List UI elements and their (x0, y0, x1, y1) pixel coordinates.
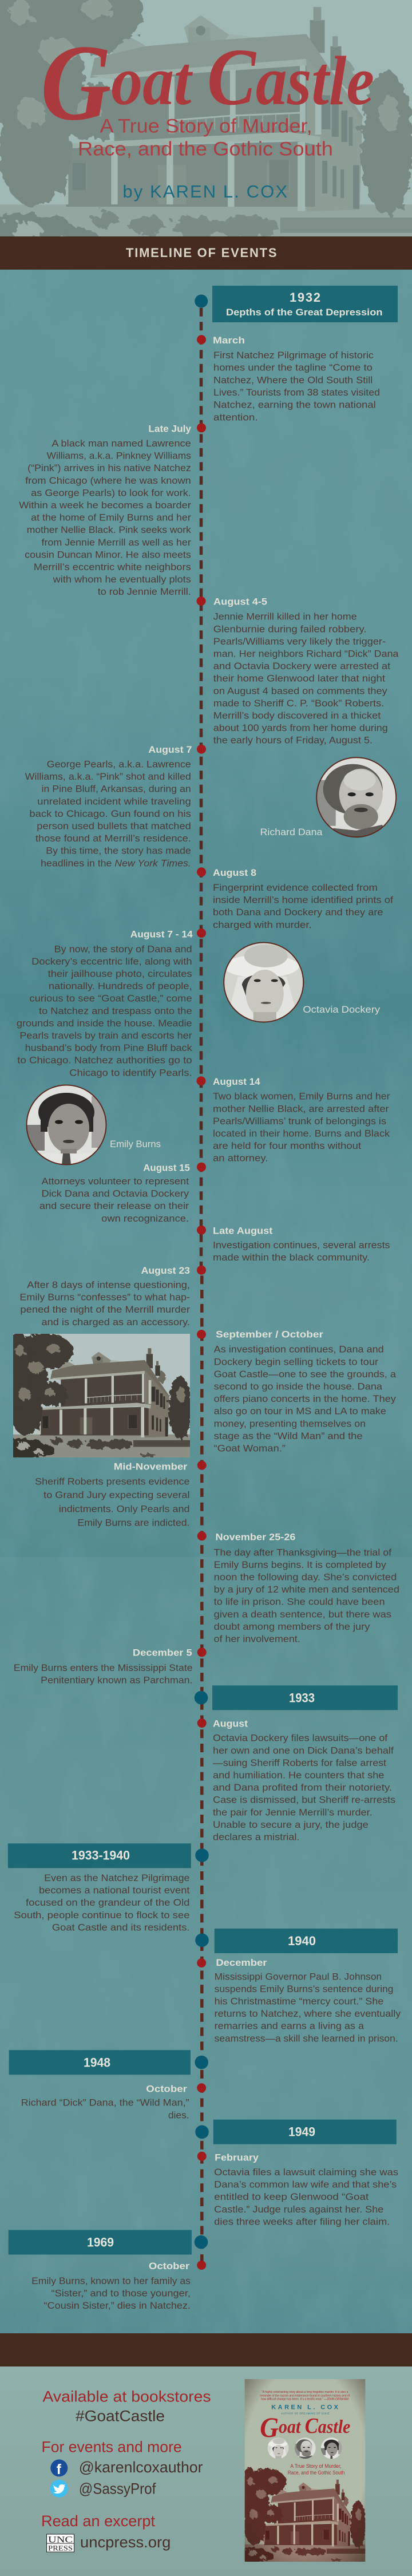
event: August 7: Williams, a.k.a. “Pink” shot and killed (25, 772, 191, 782)
event: August 8: charged with murder. (213, 920, 312, 930)
year block: 1932 (195, 286, 398, 322)
event: Mid-November: Mid-November (114, 1461, 188, 1472)
year block: 1948 (9, 2050, 208, 2075)
year block: 1969 (9, 2230, 208, 2254)
event: August 14 (197, 1076, 390, 1164)
event: Late August (197, 1226, 390, 1263)
year block: 1933-1940: 1933-1940 (72, 1848, 130, 1863)
event: August 7: unrelated incident while traveling (37, 796, 191, 807)
event: August 1933: and Dana profited from their notoriety. (213, 1783, 392, 1793)
event: August 7: headlines in the New York Times. (41, 858, 191, 868)
event: August 7: those found at Merrill’s residence. (35, 833, 191, 844)
event: December 1940: remarries and earns a living as a (215, 2021, 365, 2032)
logo: UNC Press and url: uncpress.org (80, 2534, 171, 2551)
event: Mid-November: to Grand Jury expecting several (43, 1490, 190, 1500)
event: November 25-26 (197, 1531, 399, 1644)
year block: 1933: 1933 (289, 1690, 315, 1705)
event: October 1948: Richard “Dick” Dana, the “Wild Man,” (21, 2098, 189, 2108)
event: August 4-5: man. Her neighbors Richard “Dick” Dana (213, 649, 399, 659)
event: March: attention. (213, 412, 258, 422)
event: February 1949: February (215, 2152, 259, 2163)
event: August 7: in Pine Bluff, Arkansas, during an (41, 784, 191, 795)
event: August 4-5: about 100 yards from her home during (213, 723, 388, 733)
event: August 15: own recognizance. (101, 1214, 189, 1224)
event: August 7: August 7 (148, 744, 192, 755)
event: August 7: George Pearls, a.k.a. Lawrence (47, 759, 191, 769)
event: August 7 - 14: curious to see “Goat Castle,” come (29, 994, 192, 1004)
year block: 1933-1940: focused on the grandeur of the Old (26, 1898, 190, 1908)
portrait: Richard Dana: Richard Dana (260, 827, 323, 837)
event: August 1933: and humiliation. He counters that she (213, 1770, 384, 1780)
event: February 1949: Dana’s common law wife and that she’s (214, 2180, 397, 2190)
event: August 4-5: Merrill’s body discovered in a thicket (213, 711, 381, 721)
event: August 23: After 8 days of intense questioning, (27, 1280, 190, 1290)
event: March: homes under the tagline “Come to (213, 363, 373, 373)
event: August 4-5: made to Sheriff C. P. “Book” Roberts. (213, 698, 384, 709)
heading band: timeline of events: TIMELINE OF EVENTS (126, 246, 277, 260)
event: February 1949: entitled to keep Glenwood “Goat (214, 2192, 369, 2202)
event: August 15: Attorneys volunteer to represent (41, 1176, 189, 1187)
social: twitter (50, 2480, 156, 2498)
event: August 1933: Case is dismissed, but Sheriff re-arrests (213, 1795, 395, 1805)
logo: UNC Press and url: PRESS (48, 2544, 73, 2552)
event: Late July: from Chicago (where he was known (25, 476, 191, 486)
event: Late August: Investigation continues, several arrests (213, 1240, 390, 1250)
event: November 25-26: Emily Burns begins. It is completed by (214, 1560, 387, 1570)
event: March: First Natchez Pilgrimage of historic (213, 350, 374, 361)
subtitle: Race, and the Gothic South (78, 139, 333, 160)
year block: 1932: Depths of the Great Depression (226, 307, 382, 318)
event: March (197, 335, 380, 422)
book cover: KAREN L. COX (271, 2404, 339, 2411)
event: August 23: Emily Burns “confesses” to what hap- (19, 1293, 190, 1303)
social: twitter: @SassyProf (79, 2480, 156, 2497)
event: August 4-5: their home Glenwood later that night (213, 674, 386, 684)
event: August 1933: declares a mistrial. (213, 1832, 300, 1842)
event: August 7 - 14: their jailhouse photo, circulates (48, 969, 192, 979)
event: August 7 - 14: to Natchez and trespass onto the (39, 1006, 192, 1016)
event: August 7: person used bullets that matched (37, 821, 191, 831)
event: November 25-26: to life in prison. She could have been (214, 1597, 385, 1607)
event: August 7 - 14: nationally. Hundreds of people, (49, 981, 192, 991)
book cover: AUTHOR OF DREAMING OF DIXIE (281, 2412, 330, 2415)
year block: 1948: 1948 (84, 2056, 110, 2070)
event: Late July: cousin Duncan Minor. He also meets (25, 550, 191, 560)
year block: 1933-1940: Goat Castle and its residents. (52, 1922, 190, 1933)
event: September / October: stage as the “Wild Man” and the (214, 1431, 363, 1441)
event: August 4-5 (197, 596, 399, 746)
event: March: Lives.” Tourists from 38 states visited (213, 388, 380, 398)
event: August 8: inside Merrill’s home identified prints of (213, 895, 393, 906)
event: Mid-November: Sheriff Roberts presents evidence (35, 1476, 189, 1487)
portrait: Emily Burns: Emily Burns (110, 1139, 161, 1149)
event: December 1940: seamstress—a skill she learned in prison. (215, 2033, 398, 2044)
event: August 7 - 14: husband’s body from Pine Bluff back (25, 1043, 192, 1053)
text: availability (42, 2388, 211, 2424)
event: November 25-26: noon the following day. She’s convicted (214, 1572, 397, 1582)
event: August 7 - 14: Chicago to identify Pearls. (69, 1068, 192, 1078)
event: October 1948: dies. (168, 2111, 189, 2121)
event: August 4-5: the early hours of Friday, August 5. (213, 736, 373, 746)
event: September / October: second to go inside the house. Dana (214, 1382, 383, 1392)
event: Late July: Within a week he becomes a boarder (19, 500, 191, 511)
text: availability: #GoatCastle (76, 2407, 165, 2424)
event: December 1940: December (216, 1957, 267, 1968)
year block: 1969: 1969 (87, 2235, 114, 2250)
event: December 1940: his Christmastime “mercy court.” She (215, 1997, 383, 2007)
event: September / October: As investigation continues, Dana and (214, 1345, 384, 1355)
event: August 7: back to Chicago. Gun found on his (29, 809, 191, 819)
year block: 1933-1940: becomes a national tourist event (39, 1886, 190, 1896)
event: Late July: Late July (148, 423, 192, 434)
event: August 14: Two black women, Emily Burns and her (213, 1092, 390, 1102)
event: Late July: at the home of Emily Burns and her (31, 513, 191, 523)
event: September / October: also go on tour in MS and LA to make (214, 1406, 386, 1417)
event: September / October: September / October (216, 1329, 323, 1340)
event: Late July: Merrill’s eccentric white neighbors (34, 562, 191, 572)
event: November 25-26: given a death sentence, but there was (214, 1609, 391, 1619)
text: availability: Available at bookstores (42, 2388, 211, 2405)
event: November 25-26: of her involvement. (214, 1634, 300, 1644)
event: August 8 (197, 867, 393, 930)
event: August 14: mother Nellie Black, are arrested after (213, 1104, 389, 1114)
event: August 8: both Dana and Dockery and they are (213, 907, 383, 918)
event: December 5: Penitentiary known as Parchman. (41, 1676, 192, 1686)
event: August 14: Pearls/Williams’ trunk of belongings is (213, 1116, 386, 1127)
event: September / October: “Goat Woman.” (214, 1444, 286, 1454)
event: August 15: and secure their release on their (39, 1201, 189, 1211)
subtitle: A True Story of Murder, (100, 116, 312, 137)
event: August 4-5: on August 4 based on comments they (213, 686, 388, 696)
event: March: March (213, 335, 245, 346)
event: August 7 - 14: Dockery’s eccentric life, along with (31, 957, 192, 967)
event: August 23: pened the night of the Merrill murder (20, 1305, 191, 1315)
event: December 1940 (197, 1957, 401, 2044)
event: Late July: Williams, a.k.a. Pinkney Williams (47, 451, 191, 461)
event: August 1933 (197, 1718, 395, 1842)
text: events heading: For events and more (41, 2439, 182, 2456)
event: Late July: to rob Jennie Merrill. (98, 587, 191, 597)
event: August 1933: her own and one on Dick Dana’s behalf (213, 1745, 394, 1756)
event: October 1969: Emily Burns, known to her family as (31, 2276, 191, 2286)
event: September / October (197, 1329, 397, 1454)
year block: 1949: 1949 (288, 2125, 315, 2139)
author byline: by KAREN L. COX (122, 181, 287, 202)
event: August 7 - 14: to Chicago. Natchez authorities go to (17, 1056, 192, 1066)
timeline axis dashed line (201, 308, 202, 2261)
event: November 25-26: doubt among members of the jury (214, 1622, 370, 1632)
panel: footer background (0, 2366, 412, 2576)
year block: 1933-1940: South, people continue to flock to see (14, 1910, 190, 1921)
event: November 25-26: The day after Thanksgiving—the trial of (214, 1547, 392, 1558)
event: October 1969: “Sister,” and to those younger, (52, 2288, 191, 2298)
event: August 8: August 8 (213, 867, 256, 878)
event: March: Natchez, earning the town national (213, 400, 376, 410)
event: Late July: (“Pink”) arrives in his native Natchez (27, 463, 191, 473)
event: August 7 - 14: Pearls travels by train and escorts her (19, 1030, 192, 1041)
year block: 1933-1940 (8, 1843, 209, 1933)
event: August 23: and is charged as an accessory. (41, 1317, 190, 1327)
event: October 1948: October (146, 2083, 187, 2094)
event: August 1933: —suing Sheriff Roberts for false arrest (213, 1758, 386, 1768)
event: September / October: offers piano concerts in the home. They (214, 1394, 397, 1404)
year block: 1949 (195, 2120, 397, 2144)
event: February 1949: dies three weeks after filing her claim. (214, 2217, 390, 2227)
book cover: reminder of the racism and intolerance found in southern history and of (260, 2394, 350, 2397)
event: March: Natchez, Where the Old South Still (213, 375, 373, 385)
event: August 4-5: Pearls/Williams very likely the trigger- (213, 637, 386, 647)
book cover: G (260, 2411, 279, 2443)
event: September / October: money, presenting themselves on (214, 1419, 366, 1429)
portrait: Octavia Dockery (224, 942, 381, 1026)
event: August 7 - 14: grounds and inside the house. Meadie (17, 1018, 192, 1029)
event: Mid-November (35, 1461, 207, 1528)
event: September / October: Goat Castle—one to see the grounds, a (214, 1369, 397, 1380)
event: August 14: August 14 (213, 1076, 260, 1087)
portrait: Octavia Dockery: Octavia Dockery (303, 1004, 381, 1015)
event: August 4-5: and Octavia Dockery were arrested at (213, 661, 391, 671)
event: August 1933: Unable to secure a jury, the judge (213, 1820, 369, 1830)
event: October 1969: October (149, 2261, 190, 2271)
event: August 15 (39, 1163, 206, 1224)
event: August 4-5: August 4-5 (213, 596, 267, 607)
event: Late July: from Jennie Merrill as well as her (41, 538, 191, 548)
event: August 4-5: Jennie Merrill killed in her home (213, 612, 357, 622)
title: G (41, 23, 111, 143)
event: Late July: as George Pearls) to look for work. (31, 488, 191, 498)
event: Late July (19, 423, 206, 597)
event: August 1933: Octavia Dockery files lawsuits—one of (213, 1733, 388, 1744)
year block: 1933-1940: Even as the Natchez Pilgrimage (44, 1873, 189, 1883)
event: October 1969 (31, 2261, 206, 2311)
year block: 1932: 1932 (290, 290, 320, 305)
event: August 15: August 15 (143, 1163, 190, 1174)
event: November 25-26: by a jury of 12 white men and sentenced (214, 1585, 399, 1595)
heading band: timeline of events (0, 236, 412, 270)
event: August 7 - 14: August 7 - 14 (130, 929, 193, 939)
event: September / October: Dockery begin selling tickets to tour (214, 1357, 379, 1367)
event: August 4-5: Glenburnie during failed robbery. (213, 624, 366, 634)
event: December 5: Emily Burns enters the Mississippi State (14, 1663, 193, 1673)
event: Mid-November: Emily Burns are indicted. (77, 1518, 190, 1528)
event: Late July: with whom he eventually plots (53, 575, 191, 585)
event: August 14: are held for four months without (213, 1141, 361, 1151)
event: November 25-26: November 25-26 (215, 1532, 295, 1543)
year block: 1933 (195, 1685, 398, 1710)
event: Late August: Late August (213, 1226, 273, 1236)
event: Late July: mother Nellie Black. Pink seeks work (27, 525, 192, 535)
event: August 8: Fingerprint evidence collected from (213, 883, 378, 893)
event: August 7: By this time, the story has made (46, 846, 191, 856)
event: February 1949: Octavia files a lawsuit claiming she was (214, 2167, 398, 2178)
event: August 1933: the pair for Jennie Merrill’s murder. (213, 1807, 373, 1818)
portrait: Emily Burns (26, 1085, 161, 1165)
title: oat (111, 42, 207, 120)
book cover: how difficult change has been. It’s a terrific read.” —JOHN GRISHAM (261, 2398, 348, 2401)
event: December 5: December 5 (133, 1647, 192, 1658)
book cover: “A highly entertaining story about a long forgotten murder. It is also a (262, 2391, 348, 2394)
event: December 5 (14, 1647, 207, 1686)
event: Late July: A black man named Lawrence (52, 438, 191, 449)
event: February 1949: Castle.” Judge rules against her. She (214, 2204, 383, 2215)
logo: UNC Press and url (47, 2534, 171, 2552)
social: facebook: @karenlcoxauthor (79, 2459, 203, 2476)
event: August 14: located in their home. Burns and Black (213, 1129, 390, 1139)
book cover: Race, and the Gothic South (288, 2470, 344, 2476)
event: October 1969: “Cousin Sister,” dies in Natchez. (44, 2301, 191, 2311)
footer band (0, 2333, 412, 2366)
book cover: oat (279, 2417, 305, 2437)
logo: UNC Press and url: UNC (48, 2535, 73, 2545)
event: Late August: made within the black community. (213, 1253, 370, 1263)
event: Mid-November: indictments. Only Pearls and (59, 1504, 190, 1514)
event: August 7 - 14: By now, the story of Dana and (54, 944, 192, 954)
book cover: Castle (305, 2414, 354, 2438)
social: facebook: f (57, 2462, 62, 2478)
event: August 23: August 23 (141, 1265, 190, 1276)
event: December 1940: Mississippi Governor Paul B. Johnson (215, 1971, 382, 1982)
portrait: Richard Dana (260, 757, 397, 837)
event: December 1940: returns to Natchez, where she eventually (215, 2009, 401, 2019)
book cover (240, 2379, 368, 2565)
event: August 14: an attorney. (213, 1153, 268, 1164)
title: Castle (207, 31, 387, 122)
event: December 1940: suspends Emily Burns’s sentence during (215, 1984, 393, 1994)
book cover: A True Story of Murder, (290, 2463, 342, 2470)
year block: 1940: 1940 (288, 1934, 316, 1948)
event: October 1948 (21, 2083, 206, 2121)
text: excerpt heading: Read an excerpt (41, 2512, 155, 2530)
year block: 1940 (195, 1929, 398, 1953)
event: August 7 (25, 744, 206, 868)
event: August 7 - 14 (17, 929, 206, 1078)
subtitle (78, 116, 333, 160)
event: August 15: Dick Dana and Octavia Dockery (41, 1189, 189, 1199)
event: August 23 (19, 1265, 206, 1327)
panel: header photo (0, 0, 412, 236)
event: February 1949 (197, 2152, 398, 2227)
event: August 1933: August (213, 1718, 248, 1729)
photo: Goat Castle house (13, 1334, 190, 1457)
